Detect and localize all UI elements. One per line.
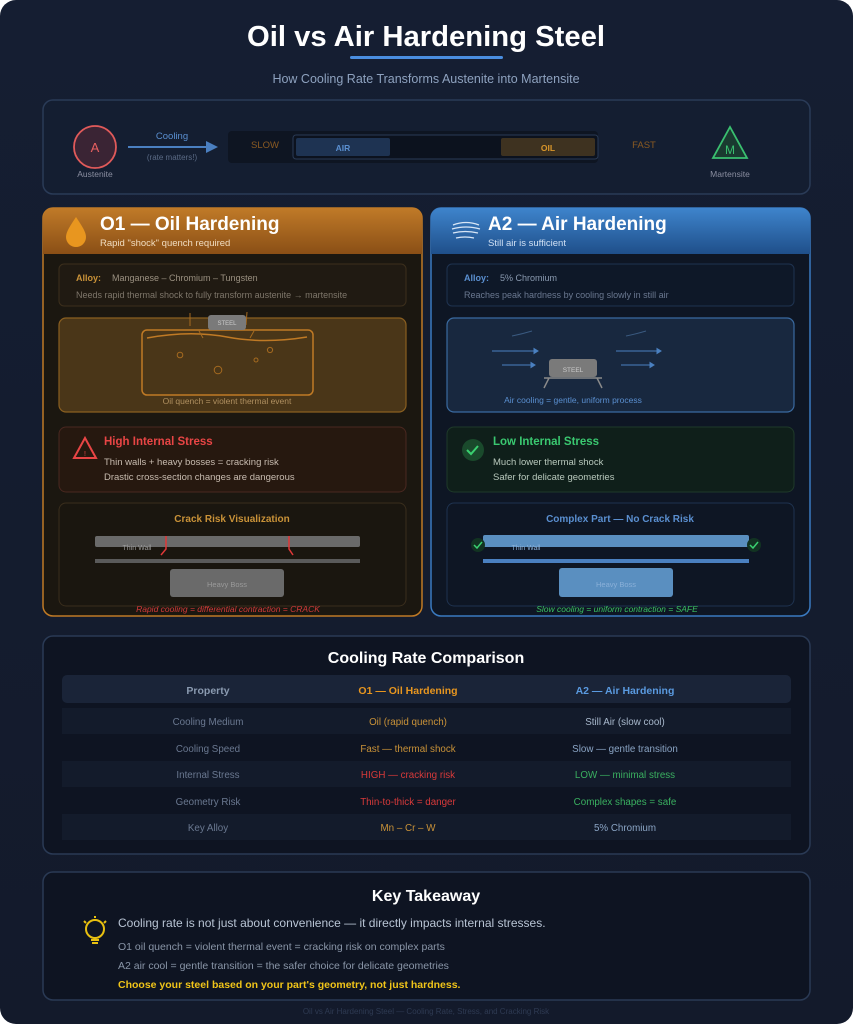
table header: O1 — Oil Hardening <box>358 685 458 697</box>
table rows: Cooling Speed <box>176 744 240 755</box>
speed bar: AIR <box>336 143 350 153</box>
alloy box: Alloy: <box>76 273 101 283</box>
icon: oil drop <box>66 217 86 247</box>
table rows: Key Alloy <box>188 823 228 834</box>
table rows: Thin-to-thick = danger <box>360 797 457 808</box>
table rows: Oil (rapid quench) <box>369 717 447 728</box>
icon: martensite <box>710 127 750 179</box>
callout: low internal stress: Much lower thermal shock <box>493 457 604 468</box>
chart: crack risk visualization <box>59 503 406 614</box>
table rows: Fast — thermal shock <box>360 744 456 755</box>
footer: Oil vs Air Hardening Steel — Cooling Rate, Stress, and Cracking Risk <box>303 1007 550 1016</box>
alloy box <box>59 264 406 306</box>
heading: A2: A2 — Air Hardening <box>488 214 667 235</box>
table rows: Complex shapes = safe <box>574 797 677 808</box>
table rows: LOW — minimal stress <box>575 770 675 781</box>
air cooling illustration <box>447 318 794 412</box>
table rows: 5% Chromium <box>594 823 656 834</box>
alloy box: Needs rapid thermal shock to fully transform austenite → martensite <box>76 290 347 300</box>
chart: crack risk visualization: Heavy Boss <box>207 580 247 589</box>
subtitle: How Cooling Rate Transforms Austenite into Martensite <box>272 72 580 86</box>
table rows: HIGH — cracking risk <box>361 770 455 781</box>
arrow: cooling <box>128 131 218 162</box>
callout: high internal stress: ! <box>84 451 86 458</box>
callout: low internal stress: Low Internal Stress <box>493 436 599 448</box>
callout: low internal stress <box>447 427 794 492</box>
panel: key takeaway: Key Takeaway <box>372 888 480 905</box>
takeaway text <box>118 916 546 991</box>
icon: austenite: A <box>91 140 100 155</box>
icon: martensite: Martensite <box>710 169 750 179</box>
speed bar: FAST <box>632 140 656 151</box>
panel: cooling scale <box>43 100 810 194</box>
air cooling illustration: Air cooling = gentle, uniform process <box>504 395 642 405</box>
panel: A2 air hardening <box>431 208 810 616</box>
takeaway text: Cooling rate is not just about convenience — it directly impacts internal stresses. <box>118 916 546 930</box>
oil quench illustration: Oil quench = violent thermal event <box>163 396 292 406</box>
oil quench illustration <box>59 312 406 412</box>
panel: O1 oil hardening <box>43 208 422 616</box>
table header: A2 — Air Hardening <box>576 685 674 697</box>
panel: key takeaway <box>43 872 810 1000</box>
chart: crack risk visualization: Rapid cooling = differential contraction = CRACK <box>136 604 320 614</box>
icon: austenite <box>74 126 116 179</box>
icon: lightbulb <box>84 916 106 943</box>
takeaway text: Choose your steel based on your part's geometry, not just hardness. <box>118 979 461 991</box>
heading: A2: Still air is sufficient <box>488 238 566 249</box>
icon: martensite: M <box>725 143 735 157</box>
table rows: Mn – Cr – W <box>381 823 436 834</box>
heading: comparison: Cooling Rate Comparison <box>328 650 524 667</box>
speed bar <box>228 131 656 163</box>
heading: A2 <box>488 214 667 249</box>
chart: complex part no crack: Heavy Boss <box>596 580 636 589</box>
chart: crack risk visualization: Thin Wall <box>123 545 152 552</box>
callout: low internal stress: Safer for delicate geometries <box>493 472 615 483</box>
table rows: Slow — gentle transition <box>572 744 678 755</box>
air cooling illustration: STEEL <box>563 367 584 374</box>
table rows: Internal Stress <box>176 770 240 781</box>
chart: complex part no crack: Slow cooling = uniform contraction = SAFE <box>536 604 698 614</box>
icon: austenite: Austenite <box>77 169 113 179</box>
table header <box>62 675 791 703</box>
alloy box: 5% Chromium <box>500 273 557 283</box>
heading: O1: Rapid "shock" quench required <box>100 238 230 249</box>
chart: crack risk visualization: Crack Risk Visualization <box>174 514 290 525</box>
table rows: Cooling Medium <box>173 717 243 728</box>
table rows: Geometry Risk <box>176 797 240 808</box>
speed bar: SLOW <box>251 140 279 151</box>
table rows: Still Air (slow cool) <box>585 717 665 728</box>
speed bar: OIL <box>541 143 555 153</box>
callout: high internal stress: High Internal Stress <box>104 436 213 448</box>
chart: complex part no crack: Thin Wall <box>512 545 541 552</box>
chart: complex part no crack <box>447 503 794 614</box>
icon: air waves <box>452 222 480 238</box>
oil quench illustration: STEEL <box>217 321 237 327</box>
takeaway text: O1 oil quench = violent thermal event = cracking risk on complex parts <box>118 941 445 953</box>
alloy box <box>447 264 794 306</box>
alloy box: Manganese – Chromium – Tungsten <box>112 273 258 283</box>
heading: O1 <box>100 214 279 249</box>
arrow: cooling: Cooling <box>156 131 188 142</box>
title: Oil vs Air Hardening Steel <box>247 21 605 53</box>
alloy box: Alloy: <box>464 273 489 283</box>
takeaway text: A2 air cool = gentle transition = the safer choice for delicate geometries <box>118 960 449 972</box>
arrow: cooling: (rate matters!) <box>147 153 197 162</box>
table rows <box>62 708 791 840</box>
table header: Property <box>186 685 230 697</box>
callout: high internal stress <box>59 427 406 492</box>
callout: high internal stress: Drastic cross-section changes are dangerous <box>104 472 295 483</box>
panel: cooling rate comparison table <box>43 636 810 854</box>
heading: O1: O1 — Oil Hardening <box>100 214 279 235</box>
callout: high internal stress: Thin walls + heavy bosses = cracking risk <box>104 457 279 468</box>
alloy box: Reaches peak hardness by cooling slowly in still air <box>464 290 669 300</box>
chart: complex part no crack: Complex Part — No Crack Risk <box>546 514 694 525</box>
